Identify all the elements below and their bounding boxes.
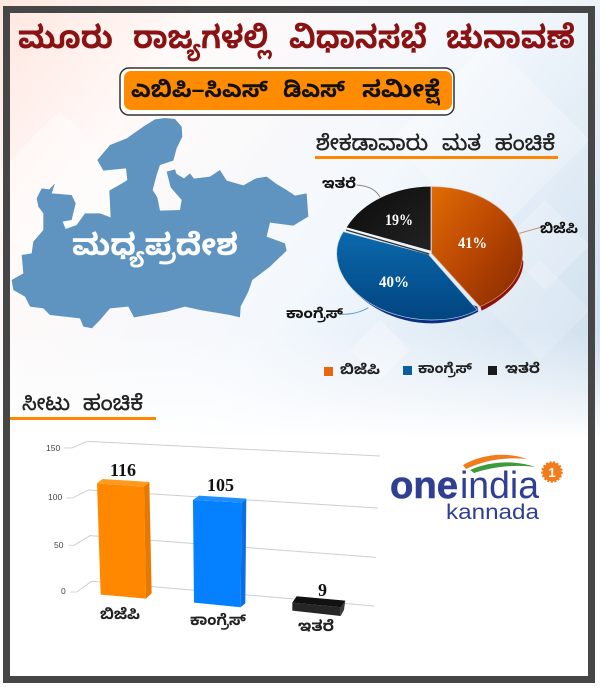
bar chart: ಕಾಂಗ್ರೆಸ್ — [190, 612, 247, 630]
slice: BJP 41% — [432, 187, 523, 307]
axis labels: 50 — [54, 540, 64, 550]
logo: oneindia kannada: one — [390, 465, 458, 507]
axis labels: 150 — [46, 443, 60, 453]
bar: others — [292, 603, 341, 616]
slice: Congress 40% — [337, 232, 477, 320]
grid lines — [72, 441, 380, 606]
logo: oneindia kannada — [390, 455, 562, 524]
bar chart: ಇತರೆ — [298, 618, 334, 635]
axis labels: 0 — [61, 586, 66, 596]
legend: ಬಿಜೆಪಿ — [340, 361, 380, 377]
heading: seat share: ಸೀಟು — [22, 392, 70, 415]
subtitle badge: ಎಬಿಪಿ–ಸಿಎಸ್ — [131, 76, 269, 102]
title: ವಿಧಾನಸಭೆ — [289, 19, 427, 55]
bar chart: 9 — [318, 580, 327, 600]
logo: oneindia kannada: kannada — [446, 501, 539, 524]
heading: vote share: ಶೇಕಡಾವಾರು — [316, 132, 428, 155]
legend: ಕಾಂಗ್ರೆಸ್ — [418, 360, 473, 378]
axis ticks — [64, 448, 77, 592]
map: Madhya Pradesh — [12, 118, 308, 328]
heading: seat share: ಹಂಚಿಕೆ — [83, 392, 143, 415]
bar chart — [40, 436, 406, 640]
pie value labels: 19% — [385, 212, 413, 229]
heading: vote share — [315, 132, 558, 159]
legend: ಇತರೆ — [505, 360, 540, 376]
title — [18, 19, 575, 62]
pie chart: ಬಿಜೆಪಿ — [540, 220, 578, 236]
pie chart: 41% — [458, 235, 487, 252]
logo: oneindia kannada: 1 — [548, 465, 556, 480]
heading: seat share — [10, 392, 156, 420]
title: ಮೂರು — [18, 19, 113, 55]
map label: ಮಧ್ಯಪ್ರದೇಶ — [72, 229, 238, 268]
heading: vote share: ಮತ — [442, 132, 481, 155]
axis labels: 100 — [48, 492, 62, 502]
pie chart — [286, 175, 578, 323]
pie category labels: ಇತರೆ — [322, 175, 356, 191]
heading: vote share: ಹಂಚಿಕೆ — [495, 132, 555, 155]
category labels: ಬಿಜೆಪಿ — [100, 606, 140, 623]
legend — [324, 360, 540, 378]
subtitle badge — [120, 68, 454, 115]
slice: others 19% — [347, 187, 431, 251]
leader lines — [357, 185, 380, 197]
title: ರಾಜ್ಯಗಳಲ್ಲಿ — [133, 19, 272, 62]
logo: oneindia kannada: india — [460, 465, 540, 507]
bar: BJP — [97, 483, 146, 599]
axis labels — [46, 443, 66, 596]
subtitle badge: ಸಮೀಕ್ಷೆ — [362, 76, 440, 106]
pie chart: ಕಾಂಗ್ರೆಸ್ — [286, 305, 344, 323]
bar: Congress — [193, 500, 242, 607]
bar chart: 105 — [207, 475, 234, 495]
slice depth — [337, 253, 478, 323]
subtitle badge: ಡಿಎಸ್ — [283, 76, 346, 102]
title: ಚುನಾವಣೆ — [446, 19, 575, 55]
value labels: 116 — [110, 460, 136, 480]
pie chart: 40% — [379, 274, 409, 291]
